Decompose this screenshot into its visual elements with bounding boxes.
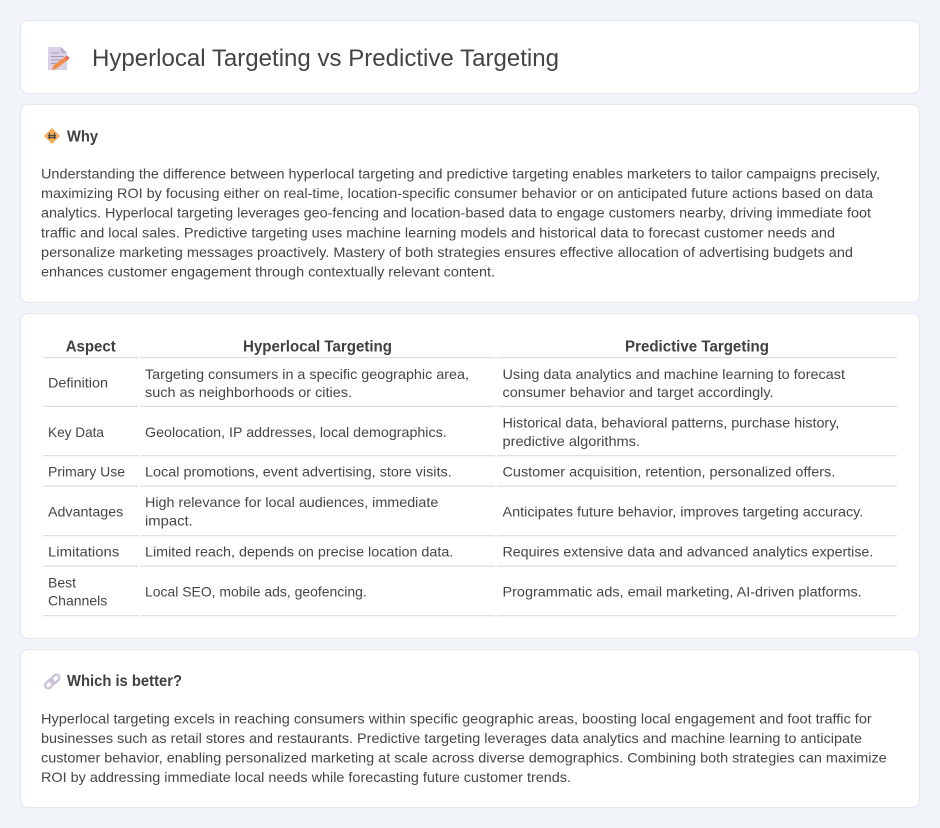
row: advantages: Advantages (48, 504, 123, 520)
row: best channels: Best (48, 574, 76, 590)
row: definition: Using data analytics and machine learning to forecast (502, 366, 845, 382)
row: key data: Geolocation, IP addresses, local demographics. (145, 424, 447, 440)
table rules (43, 357, 897, 616)
row: definition: such as neighborhoods or cities. (145, 384, 352, 400)
table header: Predictive Targeting (625, 338, 769, 356)
heading: which is better: Which is better? (67, 673, 182, 690)
icon: link (44, 673, 61, 690)
text block: why paragraph (41, 166, 880, 280)
row: key data (48, 414, 839, 449)
heading: why: Why (67, 128, 98, 146)
row: best channels (48, 574, 862, 608)
row: primary use (48, 464, 835, 480)
row: definition: consumer behavior and target accordingly. (502, 384, 774, 400)
text block: which is better paragraph (41, 710, 887, 785)
row: key data: predictive algorithms. (502, 433, 640, 449)
row: limitations: Limitations (48, 544, 119, 560)
table header: Aspect (66, 338, 116, 356)
text block: which is better paragraph: businesses such as retail stores and restaurants. Predictive targeting leverages data analytics and machine learning to anticipate (41, 730, 862, 746)
row: advantages (48, 494, 863, 528)
row: best channels: Programmatic ads, email marketing, AI-driven platforms. (502, 584, 862, 600)
row: key data: Key Data (48, 424, 104, 440)
row: definition: Definition (48, 374, 108, 390)
row: limitations (48, 544, 873, 560)
table header (66, 338, 769, 356)
row: primary use: Customer acquisition, retention, personalized offers. (502, 464, 835, 480)
row: best channels: Local SEO, mobile ads, geofencing. (145, 584, 367, 600)
panel: which is better (20, 650, 920, 808)
panel: title card (20, 20, 920, 94)
row: primary use: Local promotions, event advertising, store visits. (145, 464, 452, 480)
row: advantages: impact. (145, 512, 193, 528)
panel: comparison table (20, 314, 920, 638)
row: best channels: Channels (48, 592, 107, 608)
panel: why (20, 104, 920, 302)
row: definition (48, 366, 845, 400)
icon: orange diamond (44, 128, 60, 144)
row: limitations: Limited reach, depends on precise location data. (145, 544, 453, 560)
table header: Hyperlocal Targeting (243, 338, 392, 356)
icon: document with pencil (48, 47, 70, 70)
text block: which is better paragraph: customer behavior, enabling personalized marketing at scale across diverse demographics. Combining both strategies can maximize (41, 750, 887, 766)
row: advantages: High relevance for local audiences, immediate (145, 494, 439, 510)
row: limitations: Requires extensive data and advanced analytics expertise. (502, 544, 873, 560)
row: advantages: Anticipates future behavior, improves targeting accuracy. (502, 504, 863, 520)
text block: which is better paragraph: Hyperlocal targeting excels in reaching consumers within specific geographic areas, boosting local engagement and foot traffic for (41, 710, 872, 726)
text block: why paragraph: traffic and local sales. Predictive targeting uses machine learning models and historical data to forecast customer needs and (41, 224, 835, 240)
text block: why paragraph: analytics. Hyperlocal targeting leverages geo-fencing and location-based data to engage customers nearby, driving immediate foot (41, 205, 871, 221)
text block: why paragraph: personalize marketing messages proactively. Mastery of both strategies ensures effective allocation of advertising budgets and (41, 244, 853, 260)
row: definition: Targeting consumers in a specific geographic area, (145, 366, 469, 382)
row: primary use: Primary Use (48, 464, 125, 480)
text block: why paragraph: maximizing ROI by focusing either on real-time, location-specific consumer behavior or on anticipated future actions based on data (41, 185, 873, 201)
title: Hyperlocal Targeting vs Predictive Targeting (92, 45, 559, 72)
row: key data: Historical data, behavioral patterns, purchase history, (502, 414, 839, 430)
text block: why paragraph: Understanding the difference between hyperlocal targeting and predictive targeting enables marketers to tailor campaigns precisely, (41, 166, 880, 182)
text block: why paragraph: enhances customer engagement through contextually relevant content. (41, 264, 495, 280)
text block: which is better paragraph: ROI by addressing immediate local needs while forecasting future customer trends. (41, 769, 571, 785)
